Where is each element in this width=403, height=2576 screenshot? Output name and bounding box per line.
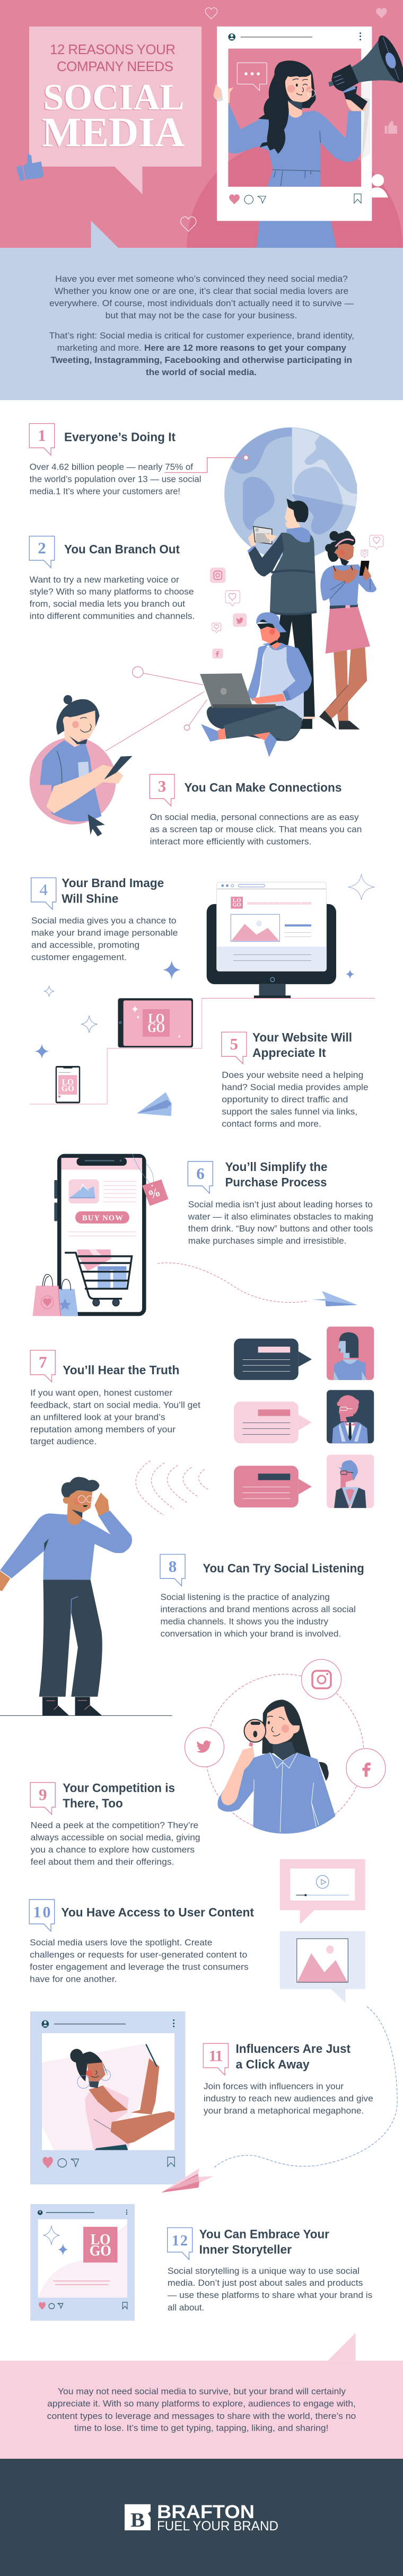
number badge 7 bbox=[30, 1350, 55, 1382]
body 2 bbox=[30, 575, 195, 621]
body 12: Social storytelling is a unique way to use social bbox=[168, 2266, 360, 2276]
heading 11 bbox=[235, 2042, 351, 2071]
body 7: target audience. bbox=[30, 1437, 97, 1446]
chat bubble bbox=[237, 63, 267, 91]
number badge 9: 9 bbox=[39, 1785, 47, 1804]
body 7: feedback, start on social media. You’ll get bbox=[30, 1400, 200, 1410]
shoe tile bbox=[68, 1179, 99, 1203]
number badge 3: 3 bbox=[158, 777, 166, 795]
illustration: chat bubbles and avatars bbox=[136, 1326, 374, 1515]
intro text: Tweeting, Instagramming, Facebooking and otherwise participating in bbox=[51, 355, 352, 365]
body 11: industry to reach new audiences and give bbox=[204, 2094, 373, 2103]
body 7: an unfiltered look at your brand’s bbox=[30, 1412, 165, 1422]
title: SOCIAL bbox=[42, 77, 183, 119]
title: SOCIAL bbox=[43, 77, 185, 118]
heading 7: You’ll Hear the Truth bbox=[63, 1363, 179, 1377]
body 7: If you want open, honest customer bbox=[30, 1388, 173, 1398]
illustration: globe and standing people bbox=[30, 427, 383, 836]
body 1 bbox=[30, 463, 201, 496]
heading 1: Everyone’s Doing It bbox=[64, 430, 176, 444]
section 8 bbox=[160, 1554, 364, 1638]
panel: closing band bbox=[0, 2333, 403, 2459]
heading 9 bbox=[63, 1781, 175, 1810]
face bbox=[285, 74, 312, 102]
social post frame with woman and megaphone bbox=[213, 27, 403, 221]
heading 6: Purchase Process bbox=[225, 1175, 327, 1189]
body 8: media channels. It shows you the industry bbox=[160, 1617, 329, 1627]
number badge 11 bbox=[203, 2043, 228, 2075]
body 6 bbox=[188, 1200, 373, 1246]
section 10 bbox=[29, 1900, 254, 1984]
section 2 bbox=[29, 536, 195, 621]
panel: footer bbox=[0, 2459, 403, 2576]
body 8 bbox=[160, 1593, 356, 1638]
woman with phone bbox=[319, 531, 376, 730]
closing text: time to lose. It’s time to get typing, tapping, liking, and sharing! bbox=[74, 2424, 328, 2433]
logo labels: GO bbox=[62, 1084, 74, 1093]
body 9: feel about them and their offerings. bbox=[31, 1858, 174, 1867]
heading 6: You’ll Simplify the bbox=[225, 1160, 328, 1174]
monitor bbox=[207, 882, 336, 998]
globe bbox=[224, 427, 357, 560]
social icons and hearts bbox=[210, 535, 383, 658]
buy now button bbox=[75, 1211, 129, 1224]
number badge 11: 11 bbox=[209, 2047, 223, 2065]
body 12: — use these platforms to share what your brand is bbox=[168, 2291, 372, 2300]
section 12 bbox=[168, 2227, 372, 2312]
number badge 12: 12 bbox=[172, 2233, 188, 2249]
section 3 bbox=[150, 775, 362, 847]
body 10 bbox=[30, 1938, 249, 1984]
body 8: conversation in which your brand is involved. bbox=[160, 1629, 341, 1638]
body 9: Need a peek at the competition? They’re bbox=[31, 1821, 198, 1831]
body 4 bbox=[31, 916, 178, 962]
logo: Brafton bbox=[125, 2502, 278, 2534]
heading 11: a Click Away bbox=[235, 2057, 310, 2071]
body 5 bbox=[222, 1070, 369, 1129]
panel: influencer post bbox=[30, 2011, 186, 2184]
tablet bbox=[118, 998, 193, 1047]
illustration: man listening bbox=[0, 1477, 172, 1715]
shopping cart and bags bbox=[33, 1250, 132, 1316]
logo: Brafton: B bbox=[130, 2509, 145, 2531]
avatar 3 bbox=[327, 1455, 374, 1508]
body 5: Does your website need a helping bbox=[222, 1070, 363, 1080]
woman bbox=[217, 1699, 336, 1834]
closing text bbox=[47, 2387, 356, 2433]
logo labels: LO bbox=[233, 898, 241, 904]
body 9: you a chance to explore how customers bbox=[31, 1845, 195, 1855]
panel: header bbox=[0, 0, 403, 248]
intro text: marketing and more. bbox=[57, 343, 142, 353]
body 4: and accessible, promoting bbox=[31, 940, 139, 950]
body 11: Join forces with influencers in your bbox=[204, 2082, 344, 2092]
number badge 9 bbox=[30, 1783, 55, 1815]
body 1: Over 4.62 billion people — nearly 75% of bbox=[30, 463, 193, 472]
intro text: Here are 12 more reasons to get your company bbox=[144, 343, 347, 353]
closing text: appreciate it. With so many platforms to explore, audiences to engage with, bbox=[47, 2399, 356, 2408]
body 10: have for one another. bbox=[30, 1975, 117, 1984]
body 6: make purchases simple and irresistible. bbox=[188, 1236, 346, 1246]
body 2: into different communities and channels. bbox=[30, 612, 195, 621]
number badge 10: 10 bbox=[33, 1904, 51, 1921]
title: MEDIA bbox=[41, 110, 185, 157]
heading 4 bbox=[62, 876, 164, 905]
number badge 6: 6 bbox=[196, 1164, 205, 1183]
heading 5: Appreciate It bbox=[252, 1046, 326, 1060]
body 3: as a screen tap or mouse click. That means you can bbox=[150, 825, 362, 835]
heading 8: You Can Try Social Listening bbox=[203, 1562, 364, 1575]
body 8: interactions and brand mentions across all social bbox=[160, 1605, 356, 1615]
heading 2: You Can Branch Out bbox=[64, 542, 180, 556]
body 8: Social listening is the practice of analyzing bbox=[160, 1593, 330, 1602]
frame shadow bbox=[361, 82, 370, 161]
logo text: GO bbox=[90, 2243, 111, 2259]
number badge 6 bbox=[188, 1161, 213, 1193]
intro text: the world of social media. bbox=[146, 368, 257, 377]
bubble row 3 bbox=[234, 1466, 312, 1507]
price tag bbox=[133, 1154, 168, 1206]
intro text: That’s right: Social media is critical for customer experience, brand identity, bbox=[49, 331, 354, 341]
body 3: interact more efficiently with customers. bbox=[150, 837, 312, 847]
number badge 12 bbox=[168, 2228, 192, 2259]
body 9: always accessible on social media, giving bbox=[31, 1833, 200, 1843]
seated man with laptop bbox=[200, 612, 312, 757]
heading 3: You Can Make Connections bbox=[185, 780, 341, 794]
number badge 5 bbox=[222, 1032, 247, 1064]
illustration: woman with magnifying glass and social circles bbox=[185, 1660, 386, 1834]
number badge 2: 2 bbox=[38, 539, 46, 557]
dashed flight path and plane bbox=[157, 1263, 357, 1306]
heading 5 bbox=[252, 1030, 352, 1060]
section 1 bbox=[29, 423, 202, 496]
body 3: On social media, personal connections are as easy bbox=[150, 813, 359, 822]
megaphone bbox=[346, 99, 366, 111]
avatar 2 bbox=[327, 1390, 374, 1443]
small phone bbox=[56, 1066, 80, 1103]
body 2: from, social media lets you branch out bbox=[30, 600, 185, 609]
heading 6 bbox=[225, 1160, 328, 1189]
body 3 bbox=[150, 813, 362, 847]
icon: blue thumbs up bbox=[16, 153, 43, 181]
button and tag text: BUY NOW bbox=[82, 1214, 123, 1222]
number badge 1 bbox=[29, 423, 55, 455]
illustration: devices on steps bbox=[30, 874, 375, 1116]
number badge 10 bbox=[29, 1900, 55, 1931]
image bubble bbox=[280, 1931, 365, 2003]
logo text bbox=[90, 2232, 111, 2259]
video bubble bbox=[280, 1859, 365, 1924]
body 5: contact forms and more. bbox=[222, 1119, 321, 1129]
heading 12 bbox=[199, 2227, 329, 2257]
body 4: Social media gives you a chance to bbox=[31, 916, 176, 926]
body 5: opportunity to direct traffic and bbox=[222, 1095, 348, 1104]
title bbox=[41, 41, 185, 157]
influencer woman bbox=[42, 2043, 174, 2150]
body 12: all about. bbox=[168, 2303, 204, 2312]
bubble row 2 bbox=[234, 1402, 312, 1443]
paper plane blue bbox=[137, 1092, 172, 1116]
body 9 bbox=[31, 1821, 200, 1867]
number badge 4 bbox=[31, 878, 56, 909]
sparkles bbox=[34, 874, 375, 1059]
heading 9: Your Competition is bbox=[63, 1781, 175, 1794]
phone body bbox=[54, 1156, 144, 1314]
intro text: everywhere. Of course, most individuals don’t actually need it to survive — bbox=[49, 299, 354, 308]
intro text: Have you ever met someone who’s convinced they need social media? bbox=[55, 274, 348, 284]
body 4: make your brand image personable bbox=[31, 929, 178, 938]
heading 4: Will Shine bbox=[62, 891, 118, 905]
button and tag text bbox=[82, 1185, 162, 1222]
body 5: support the sales funnel via links, bbox=[222, 1107, 357, 1116]
number badge 8: 8 bbox=[169, 1557, 177, 1576]
body 10: challenges or requests for user-generated content to bbox=[30, 1950, 247, 1960]
body 4: customer engagement. bbox=[31, 953, 127, 962]
blue tail of intro band bbox=[91, 221, 118, 248]
body 7 bbox=[30, 1388, 200, 1446]
body 10: Social media users love the spotlight. Create bbox=[30, 1938, 212, 1948]
body 11: your brand a metaphorical megaphone. bbox=[204, 2106, 364, 2116]
connector lines bbox=[106, 455, 248, 751]
panel: intro band bbox=[0, 248, 403, 400]
number badge 1: 1 bbox=[38, 426, 46, 445]
dashed orbit bbox=[206, 1674, 364, 1832]
number badge 3 bbox=[150, 775, 174, 806]
illustration: shopping phone bbox=[33, 1154, 357, 1316]
heading 12: You Can Embrace Your bbox=[199, 2227, 329, 2241]
number badge 2 bbox=[29, 536, 55, 568]
number badge 4: 4 bbox=[39, 880, 48, 899]
body 1: media.1 It’s where your customers are! bbox=[30, 487, 180, 496]
post actions bbox=[229, 194, 240, 204]
post actions bbox=[42, 2157, 174, 2169]
title: COMPANY NEEDS bbox=[57, 58, 173, 74]
header illustration background and decorations bbox=[181, 8, 403, 355]
heading 11: Influencers Are Just bbox=[235, 2042, 351, 2055]
section 5 bbox=[222, 1030, 369, 1129]
heading 9: There, Too bbox=[63, 1796, 123, 1810]
number badge 8 bbox=[160, 1554, 185, 1586]
number badge 5: 5 bbox=[230, 1035, 238, 1053]
body 2: Want to try a new marketing voice or bbox=[30, 575, 179, 585]
logo labels: LO bbox=[148, 1011, 164, 1026]
body 6: Social media isn’t just about leading horses to bbox=[188, 1200, 373, 1209]
heading 4: Your Brand Image bbox=[62, 876, 164, 890]
section 11 bbox=[203, 2042, 373, 2116]
man with tablet bbox=[247, 499, 317, 729]
product lines bbox=[68, 1181, 136, 1236]
body 7: reputation among members of your bbox=[30, 1425, 176, 1434]
closing text: content types to leverage and messages to share with the world, there’s no bbox=[47, 2412, 356, 2421]
logo labels: LO bbox=[62, 1078, 74, 1087]
section 7 bbox=[30, 1350, 200, 1446]
body 5: hand? Social media provides ample bbox=[222, 1082, 369, 1092]
number badge 7: 7 bbox=[39, 1353, 47, 1371]
hair bbox=[258, 60, 316, 154]
logo labels: GO bbox=[147, 1021, 165, 1035]
icon: twitter circle bbox=[185, 1728, 224, 1767]
section 6 bbox=[188, 1160, 373, 1246]
avatar 1 bbox=[327, 1326, 374, 1380]
dashed blue flight path bbox=[214, 2007, 397, 2167]
body 1: the world’s population over 13 — use social bbox=[30, 474, 201, 484]
illustration: user content bubbles bbox=[280, 1859, 365, 2003]
heading 12: Inner Storyteller bbox=[199, 2243, 292, 2257]
panel: storyteller post bbox=[30, 2204, 135, 2321]
intro text bbox=[49, 274, 354, 377]
logo labels: GO bbox=[233, 902, 241, 908]
body 10: foster engagement and leverage the trust consumers bbox=[30, 1962, 249, 1972]
closing text: You may not need social media to survive, but your brand will certainly bbox=[58, 2387, 346, 2396]
body 12 bbox=[168, 2266, 372, 2312]
bubble row 1 bbox=[234, 1339, 312, 1380]
title: 12 REASONS YOUR bbox=[50, 41, 176, 57]
paper plane pink bbox=[161, 2169, 214, 2192]
heading 5: Your Website Will bbox=[252, 1030, 352, 1044]
heading 10: You Have Access to User Content bbox=[61, 1905, 254, 1919]
logo text: LO bbox=[91, 2232, 110, 2248]
logo: Brafton: FUEL YOUR BRAND bbox=[157, 2519, 278, 2534]
steps line bbox=[30, 998, 375, 1104]
icon: facebook circle bbox=[346, 1749, 386, 1788]
button and tag text: % bbox=[146, 1185, 162, 1202]
body 6: water — it also eliminates obstacles to making bbox=[188, 1212, 373, 1221]
body 2: style? With so many platforms to choose bbox=[30, 587, 194, 597]
section 9 bbox=[30, 1781, 200, 1867]
logo: Brafton: BRAFTON bbox=[157, 2502, 255, 2522]
logo labels bbox=[62, 898, 241, 1093]
intro text: Whether you know one or are one, it’s clear that social media lovers are bbox=[55, 287, 348, 296]
icon: instagram circle bbox=[301, 1660, 341, 1699]
sweater bbox=[228, 102, 364, 187]
man with phone and cursor bbox=[30, 695, 133, 836]
intro text: but that may not be the case for your business. bbox=[106, 311, 297, 320]
title speech bubble bbox=[29, 27, 202, 194]
left hand bbox=[214, 85, 223, 101]
body 11 bbox=[204, 2082, 373, 2116]
body 12: media. Don’t just post about sales and products bbox=[168, 2278, 363, 2288]
section 4 bbox=[31, 876, 178, 962]
sound waves bbox=[136, 1461, 209, 1515]
title: MEDIA bbox=[42, 110, 185, 156]
body 6: them drink. “Buy now” buttons and other tools bbox=[188, 1224, 373, 1234]
